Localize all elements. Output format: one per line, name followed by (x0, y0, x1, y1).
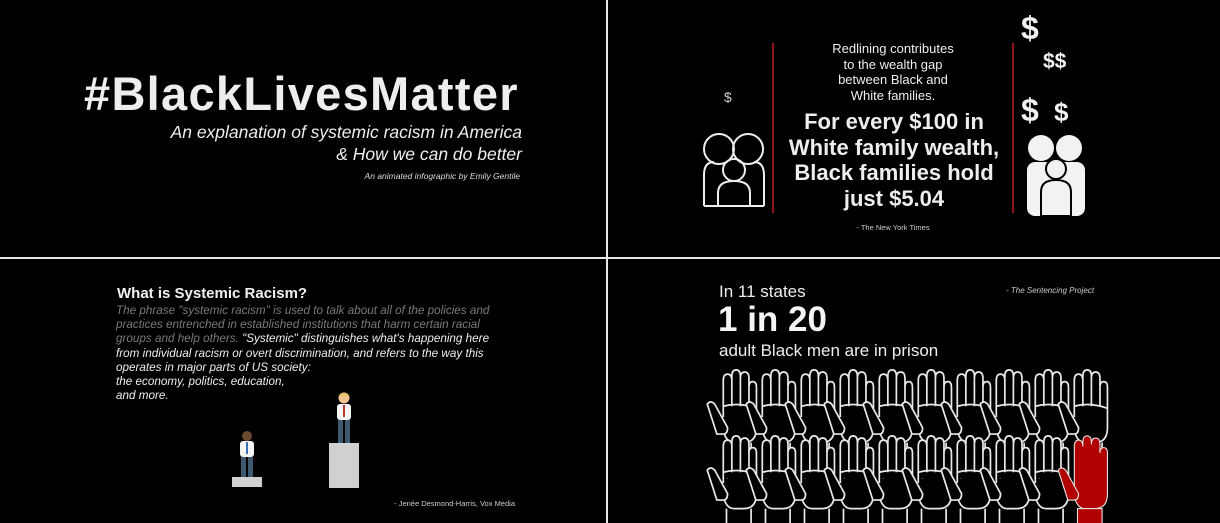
red divider left (772, 43, 774, 213)
definition text: from individual racism or overt discrimination, and refers to the way this (116, 347, 484, 360)
icon: white family filled (1027, 135, 1085, 216)
illustration: two figures on pedestals (232, 392, 359, 488)
key stat: Black families hold (794, 160, 994, 185)
panel: wealth gap (703, 10, 1085, 232)
icon: black family outline (703, 133, 765, 207)
heading: What is Systemic Racism? (117, 285, 307, 302)
byline: An animated infographic by Emily Gentile (365, 171, 520, 181)
stat label: adult Black men are in prison (719, 341, 938, 360)
definition text: The phrase "systemic racism" is used to talk about all of the policies and (116, 304, 489, 317)
key stat: White family wealth, (789, 134, 999, 160)
icon: big dollars: $ (1021, 92, 1039, 128)
redlining text: between Black and (838, 72, 948, 87)
panel: incarceration (718, 282, 1094, 360)
definition text (116, 304, 490, 402)
title: #BlackLivesMatter (84, 67, 519, 120)
icon: big dollars: $ (1021, 10, 1039, 46)
definition text: groups and help others. "Systemic" distinguishes what's happening here (116, 332, 489, 345)
redlining text: White families. (851, 88, 935, 102)
redlining text: Redlining contributes (832, 41, 954, 56)
source: - The New York Times (856, 223, 930, 232)
icon: big dollars (1021, 10, 1068, 128)
subtitle: & How we can do better (336, 144, 522, 164)
small dollar: $ (724, 89, 732, 105)
lead-in: In 11 states (719, 282, 806, 301)
source: - The Sentencing Project (1006, 286, 1094, 295)
subtitle (170, 122, 522, 164)
definition text: and more. (116, 389, 169, 402)
redlining text: to the wealth gap (843, 56, 943, 72)
stat: 1 in 20 (718, 300, 827, 339)
key stat: For every $100 in (804, 109, 984, 134)
redlining text (832, 41, 954, 102)
definition text: practices entrenched in established institutions that harm certain racial (116, 318, 480, 331)
subtitle: An explanation of systemic racism in America (171, 122, 522, 142)
key stat (788, 109, 999, 210)
source: - Jenée Desmond-Harris, Vox Media (394, 499, 515, 508)
definition text: the economy, politics, education, (116, 375, 285, 388)
red divider right (1012, 43, 1014, 213)
icon: big dollars: $$ (1043, 50, 1066, 73)
key stat: just $5.04 (844, 186, 944, 210)
icon: big dollars: $ (1054, 97, 1068, 127)
panel: systemic racism (116, 285, 516, 508)
definition text: operates in major parts of US society: (116, 361, 311, 374)
